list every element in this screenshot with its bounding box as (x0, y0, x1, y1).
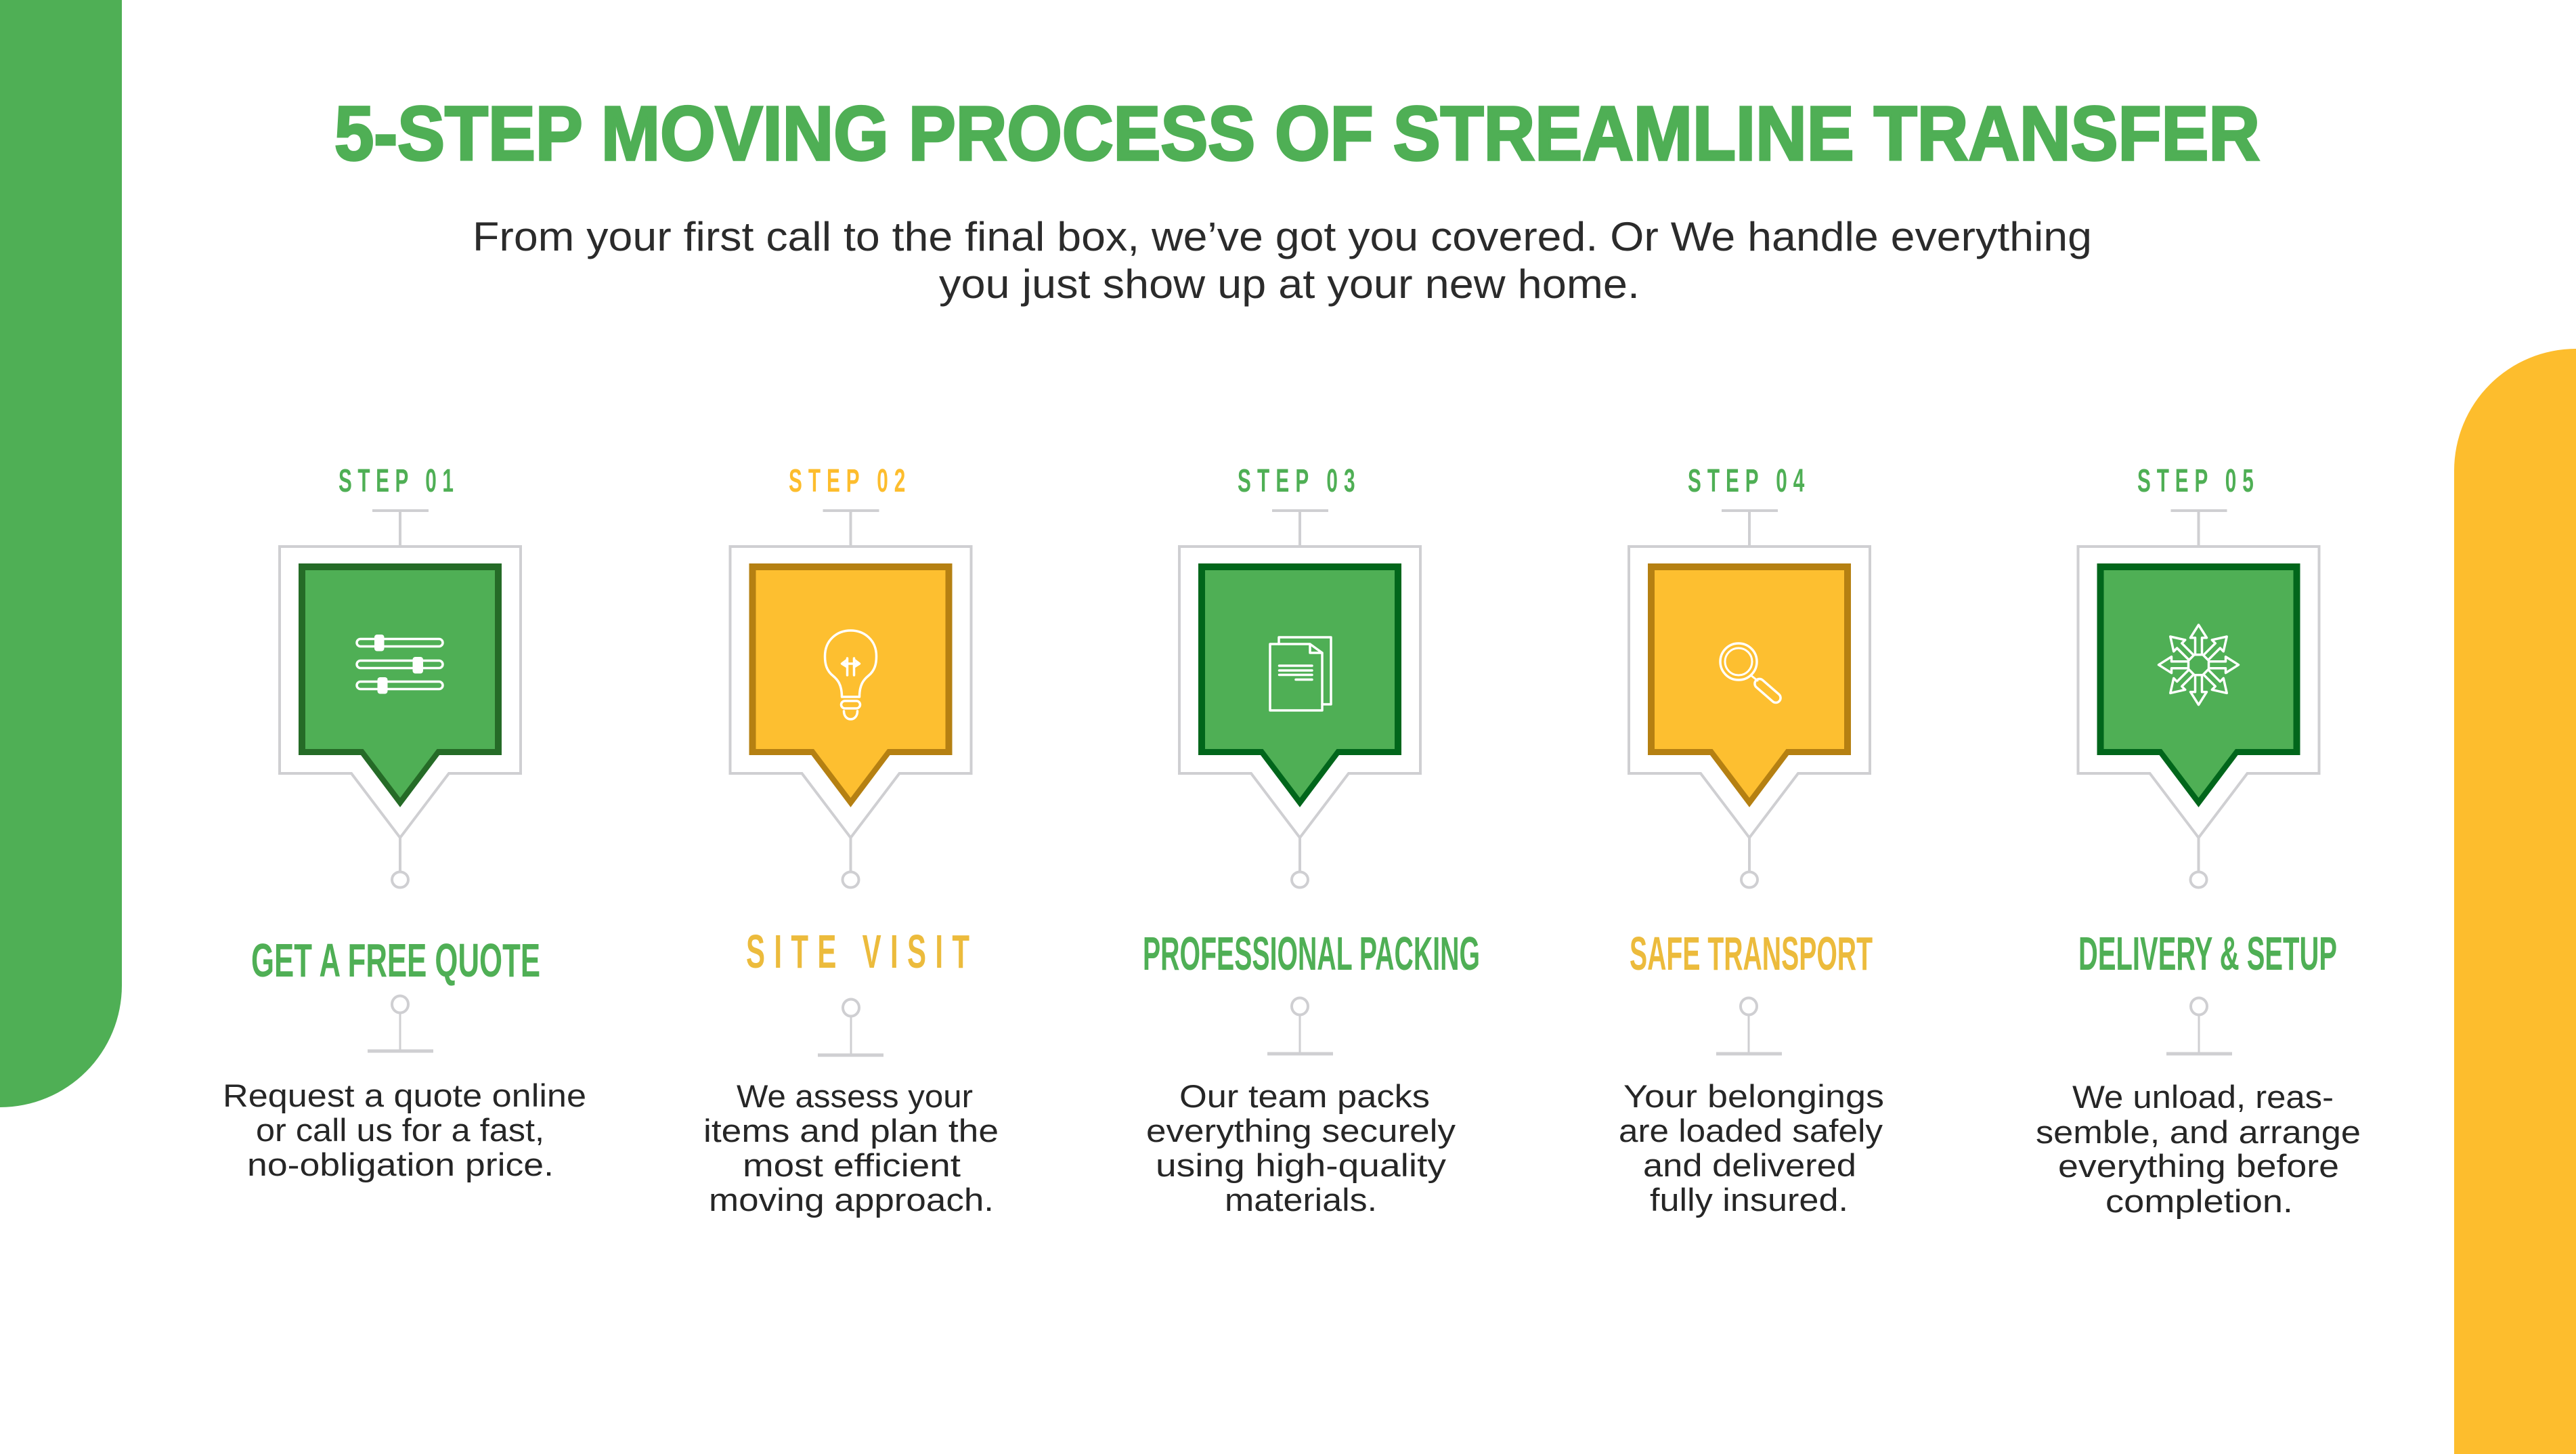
step 5 description: semble, and arrange (2036, 1114, 2361, 1150)
step 2 description: We assess your (737, 1078, 973, 1114)
step 1 connector (368, 996, 433, 1051)
step 2 description (703, 1078, 999, 1218)
step 5 (2036, 463, 2361, 1219)
step 5 marker (2078, 511, 2319, 887)
step 3 description: everything securely (1146, 1113, 1456, 1149)
step 4 description: fully insured. (1650, 1182, 1848, 1218)
step 1 description: no-obligation price. (247, 1147, 554, 1182)
step 4 marker (1629, 511, 1870, 887)
step 4 description: are loaded safely (1619, 1113, 1883, 1149)
step 1 description: or call us for a fast, (256, 1112, 544, 1148)
subtitle: you just show up at your new home. (939, 261, 1640, 307)
step 4 description: and delivered (1643, 1147, 1856, 1183)
step 2 (703, 463, 999, 1218)
step 3 description: Our team packs (1179, 1078, 1430, 1114)
step 1 heading: GET A FREE QUOTE (251, 934, 540, 987)
step 1 description (223, 1077, 586, 1182)
step 3 (1143, 463, 1480, 1218)
step 1 description: Request a quote online (223, 1077, 586, 1113)
step 4 description (1619, 1078, 1884, 1218)
step 3 description: materials. (1225, 1182, 1377, 1218)
step 3 marker (1179, 511, 1420, 887)
step 5 heading: DELIVERY & SETUP (2078, 927, 2337, 980)
step 2 marker (730, 511, 971, 887)
left green background shape (0, 0, 122, 1107)
step 2 description: moving approach. (709, 1182, 994, 1218)
subtitle (473, 214, 2092, 307)
icon: eight outward arrows (2158, 625, 2238, 705)
step 3 connector (1267, 998, 1333, 1054)
step 5 label: STEP 05 (2137, 463, 2254, 499)
step 3 heading: PROFESSIONAL PACKING (1143, 927, 1480, 980)
title: 5-STEP MOVING PROCESS OF STREAMLINE TRANSFER (334, 91, 2260, 176)
step 2 connector (818, 1000, 883, 1055)
step 4 description: Your belongings (1623, 1078, 1884, 1114)
step 5 connector (2166, 998, 2232, 1054)
step 2 heading: SITE VISIT (746, 926, 969, 979)
step 3 label: STEP 03 (1238, 463, 1355, 499)
step 2 description: items and plan the (703, 1113, 999, 1149)
step 5 description: We unload, reas- (2072, 1079, 2334, 1115)
step 1 marker (280, 511, 521, 887)
step 2 label: STEP 02 (789, 463, 905, 499)
step 3 description (1146, 1078, 1456, 1218)
step 2 description: most efficient (743, 1147, 961, 1183)
right yellow background shape (2454, 349, 2576, 1454)
step 4 connector (1716, 998, 1782, 1054)
subtitle: From your first call to the final box, we’ve got you covered. Or We handle everything (473, 214, 2092, 259)
step 5 description: completion. (2105, 1183, 2293, 1219)
step 5 description: everything before (2058, 1148, 2339, 1184)
step 3 description: using high-quality (1156, 1147, 1447, 1183)
step 4 heading: SAFE TRANSPORT (1630, 927, 1873, 980)
icon: sliders (357, 635, 443, 693)
icon: magnifying glass (1720, 643, 1783, 704)
step 1 (223, 463, 586, 1182)
icon: documents (1270, 637, 1331, 710)
icon: light bulb (825, 630, 876, 719)
step 1 label: STEP 01 (339, 463, 454, 499)
step 4 label: STEP 04 (1688, 463, 1804, 499)
step 4 (1619, 463, 1884, 1218)
step 5 description (2036, 1079, 2361, 1219)
